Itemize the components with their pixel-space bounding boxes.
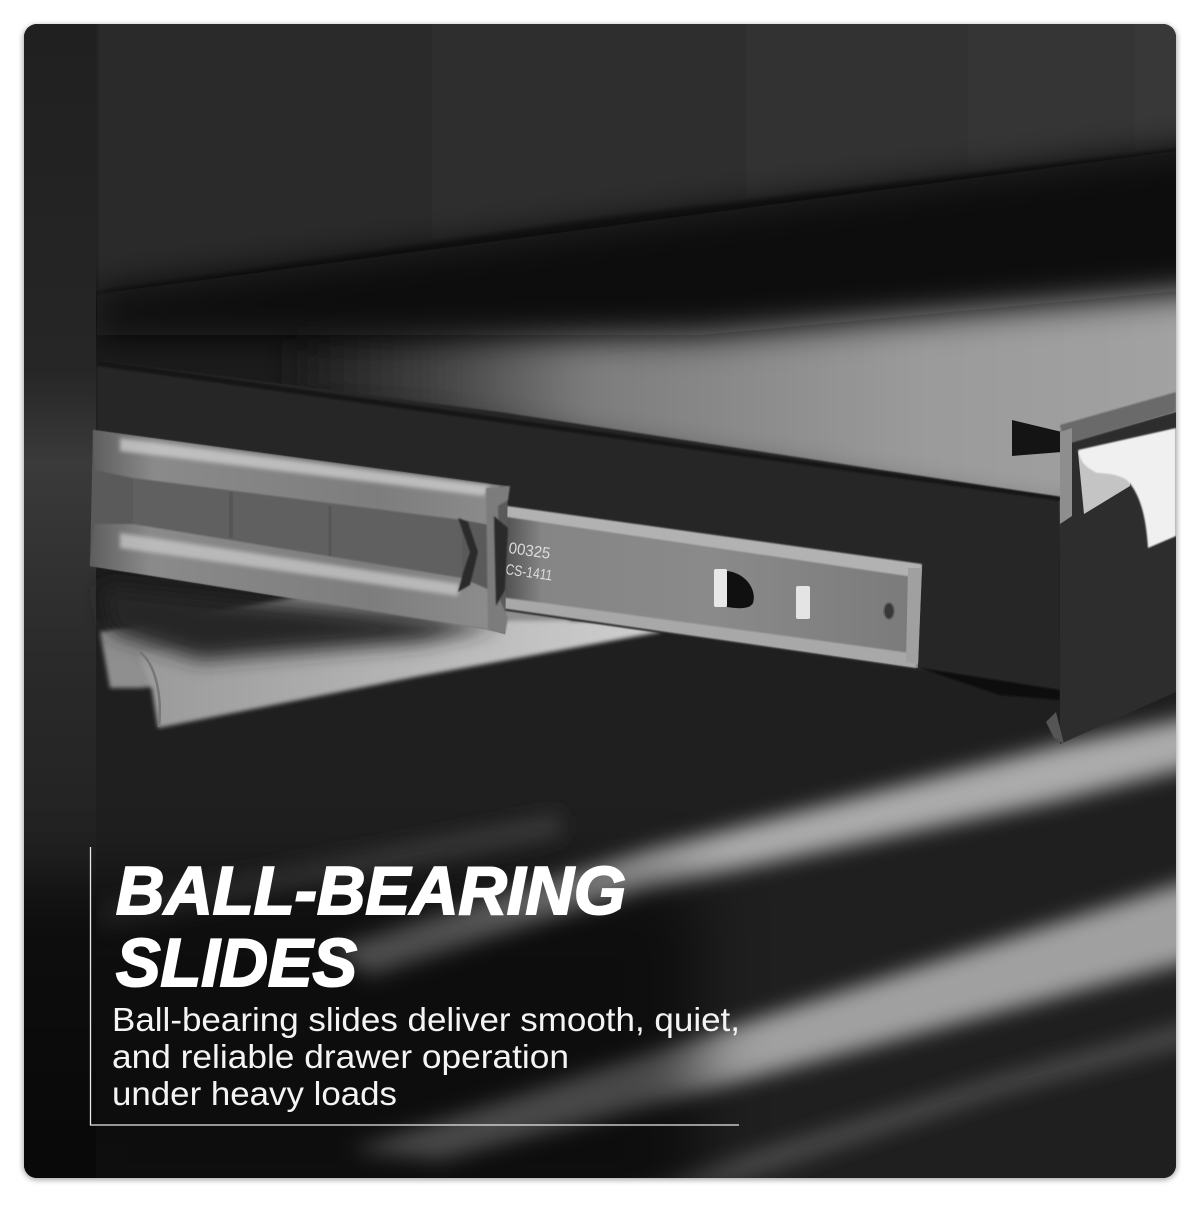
lower bright band one [330,690,1200,975]
end bracket [486,486,510,634]
inner member end plate [906,568,922,664]
upper rail [93,430,500,525]
inner slide member [500,505,922,668]
bottom lip [1046,712,1064,744]
handle arch fill [1078,440,1130,514]
drawer side top edge [97,360,1060,501]
end collar [494,516,508,606]
top drawer front [98,24,1176,290]
lower drawer shadow edge [920,668,1060,700]
stamped code: 00325 [507,540,551,563]
lower rail highlight [120,533,460,596]
white handle [1078,428,1176,548]
text-side darkening [0,880,700,1205]
small rivet hole [884,603,894,619]
faint upper band near title [100,815,560,930]
drawer floor surface [300,260,1200,520]
handle shadow under rail [100,585,500,660]
title: BALL-BEARING [116,853,626,929]
left cabinet column [24,24,96,1178]
handle notch curve [140,652,160,727]
side edge [1060,428,1072,524]
inner member top flange [500,505,922,578]
black drawer side panel [97,360,1060,692]
rectangular slot [796,586,810,619]
lower drawer front area [1164,1166,1176,1178]
keyhole bright part [714,569,727,607]
description: Ball-bearing slides deliver smooth, quiet, [112,1001,740,1038]
lower bright band two [350,850,1200,1160]
rear flange [1012,420,1062,456]
end clip [458,518,478,592]
outer slide member [90,430,510,634]
front panel [1060,412,1176,744]
title [116,853,626,1001]
handle light strip [138,620,660,728]
bottom edge bright streak [662,1017,1176,1178]
panel divider [229,492,233,538]
dark shadow under top drawer [97,132,1200,335]
keyhole dark part [727,571,754,608]
title: SLIDES [116,925,357,1001]
inner member bottom flange [500,597,918,668]
white handle under slide [100,585,660,728]
description: under heavy loads [112,1075,397,1112]
outer member body [90,430,508,634]
lower rail [90,524,490,630]
handle rear section [100,595,570,688]
description: and reliable drawer operation [112,1038,569,1075]
top lip [1060,392,1176,445]
stamped part number: CS-1411 [504,561,553,585]
inner member body [500,507,922,668]
upper rail highlight [120,438,490,496]
text block [90,847,740,1125]
frame lines [90,847,739,1125]
description [112,1001,740,1112]
keyhole slot [714,569,754,608]
right drawer front [1012,392,1176,744]
inner panel [133,478,462,578]
